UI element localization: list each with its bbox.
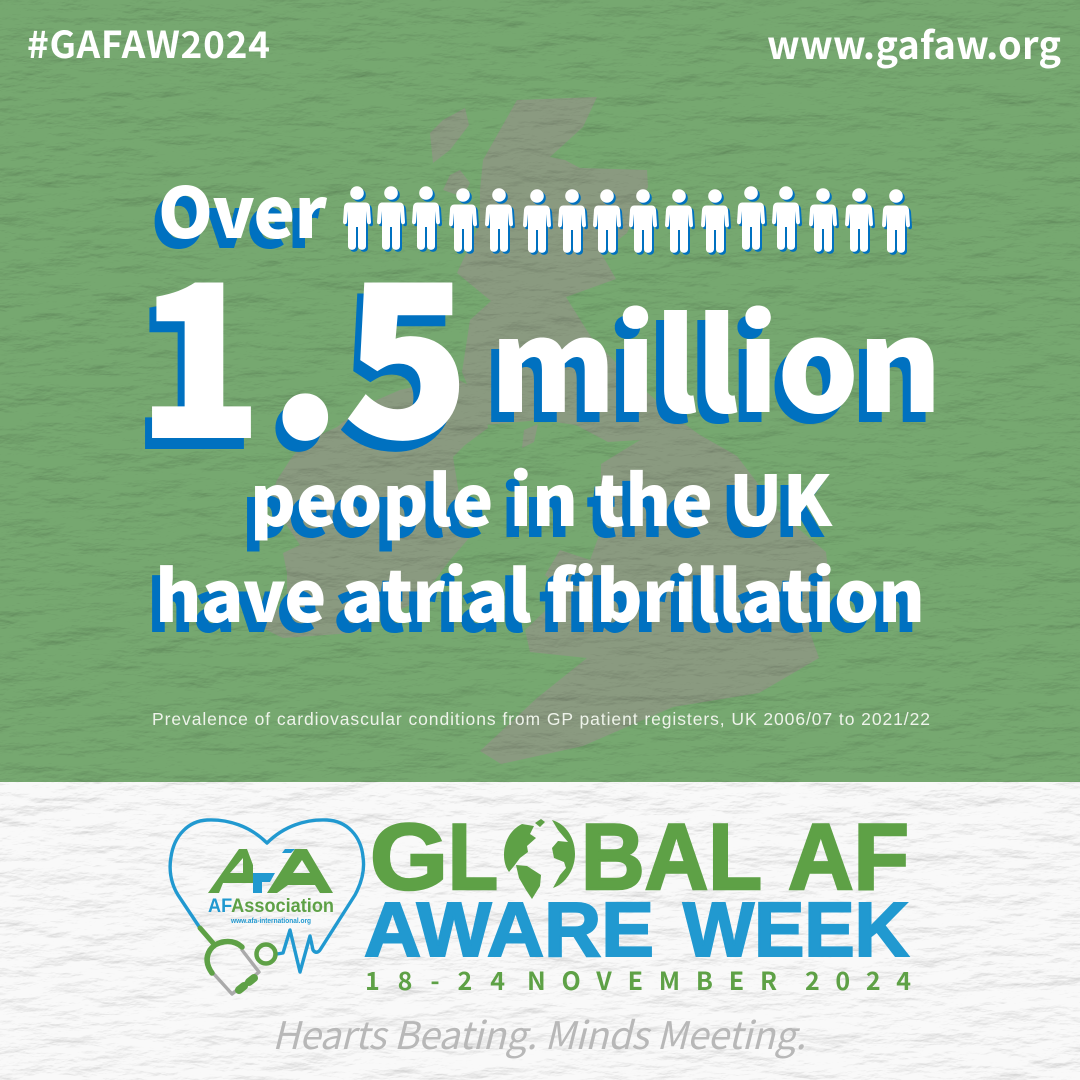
logo text: dates: 2024: [805, 962, 911, 998]
AFA monogram: [208, 849, 253, 893]
source note: Prevalence of cardiovascular conditions from GP patient registers, UK 2006/07 to 2021/22: [152, 709, 930, 729]
logo text: G: G: [370, 804, 448, 909]
logo text: dates: NOVEMBER: [527, 962, 777, 998]
headline: people in the UK: people in the UK: [242, 457, 825, 558]
hashtag: #GAFAW2024: [27, 15, 270, 69]
headline: million: million: [490, 264, 942, 449]
panel: white background: [0, 782, 1080, 1080]
AF Association name: AFAssociation: [208, 896, 334, 917]
tagline: Hearts Beating. Minds Meeting.: [272, 1005, 806, 1060]
logo text: BAL: BAL: [581, 804, 762, 909]
headline: have atrial fibrillation: have atrial fibrillation: [155, 541, 925, 643]
logo: AF Association heart: [170, 820, 364, 994]
headline: 1.5: 1.5: [137, 199, 469, 497]
logo text: L: L: [448, 804, 498, 909]
website: www.gafaw.org: [767, 15, 1061, 70]
logo text: AF: AF: [788, 804, 909, 909]
heart outline with ECG trace: [170, 820, 364, 972]
AFA website: www.afa-international.org: [230, 916, 311, 925]
headline: people in the UK: people in the UK: [250, 446, 833, 547]
panel: green background: [0, 0, 1080, 782]
logo text: AWARE: AWARE: [364, 887, 654, 973]
headline: million: million: [482, 274, 934, 459]
icon row: sixteen people: [343, 186, 912, 255]
headline: 1.5: 1.5: [130, 210, 462, 508]
stethoscope: [200, 928, 276, 994]
logo text: dates: 18-24: [365, 962, 505, 998]
map of the UK: [260, 97, 830, 764]
headline: Over: Over: [151, 168, 321, 269]
headline: Over: Over: [158, 158, 328, 259]
headline: have atrial fibrillation: have atrial fibrillation: [147, 551, 917, 653]
logo text: WEEK: WEEK: [683, 887, 909, 973]
logo text: dates: [365, 962, 911, 998]
icon: globe: [504, 819, 575, 899]
